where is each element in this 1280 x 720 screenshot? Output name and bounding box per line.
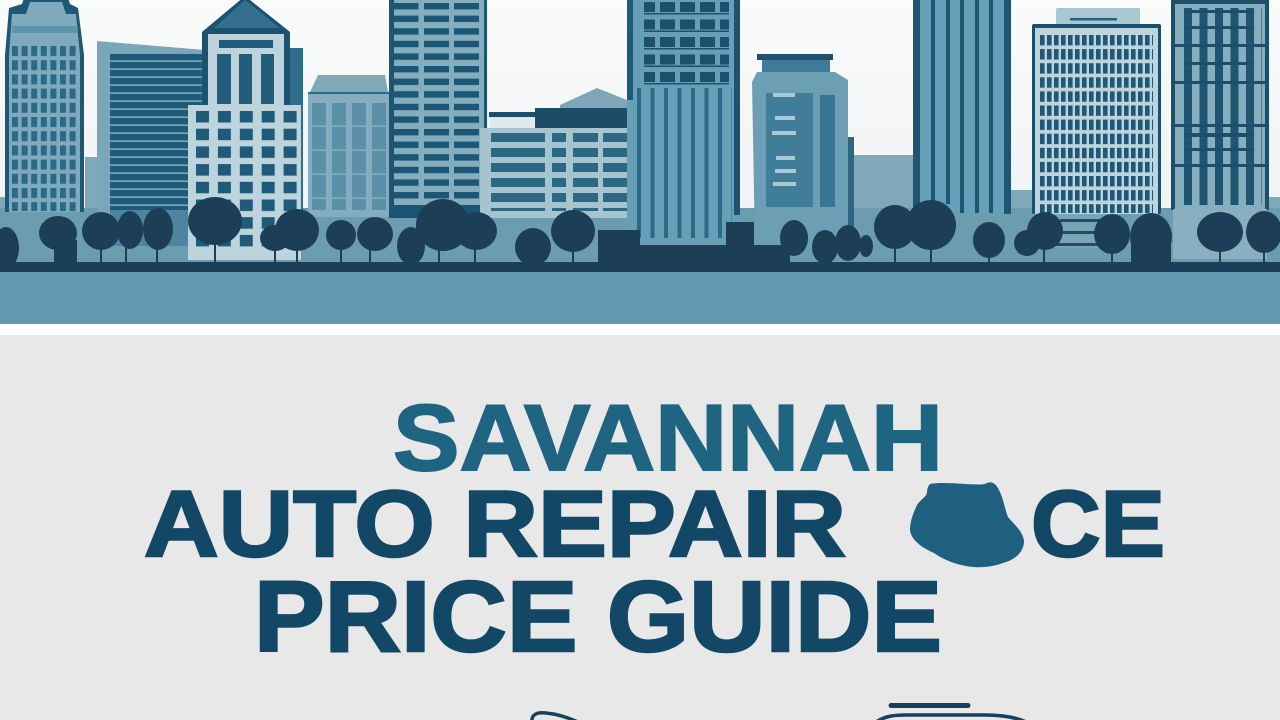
white divider strip <box>0 324 1280 335</box>
title line 1: Savannah: SAVANNAH <box>393 385 943 490</box>
dark low structures at street level <box>55 222 790 264</box>
title line 3: Price Guide: PRICE GUIDE <box>254 561 942 673</box>
title line 2: Auto Repair: AUTO REPAIR <box>144 471 846 576</box>
icon: cropped car outline left <box>532 713 582 720</box>
building 5: tall banded tower <box>389 0 487 218</box>
building 2: striped office block <box>97 41 206 246</box>
distant background buildings <box>0 155 1280 255</box>
ground behind the trees <box>0 208 1280 264</box>
river band <box>0 272 1280 324</box>
building 7: tall tower with vertical fins <box>627 0 740 242</box>
building 6: wide mid-rise with pitched roof <box>480 88 638 218</box>
dark street band <box>0 262 1280 272</box>
icon: dark engine blob covering the title <box>910 482 1024 567</box>
row of street trees <box>0 197 1280 269</box>
building 9: tower with dark vertical stripes <box>913 0 1011 214</box>
title panel background <box>0 335 1280 720</box>
title line 2 ending: CE: CE <box>1031 471 1165 576</box>
building 1: left tower <box>5 0 84 212</box>
sky background <box>0 0 1280 262</box>
icon: cropped car roof outline right <box>876 706 1026 720</box>
building 8: rounded blue mid-rise <box>752 54 854 248</box>
building 4: low glass block <box>308 75 390 217</box>
building 11: right framed tower <box>1171 0 1269 259</box>
building 10: grid-window office block <box>1032 8 1161 248</box>
building 3: peaked tower with podium <box>188 0 303 260</box>
